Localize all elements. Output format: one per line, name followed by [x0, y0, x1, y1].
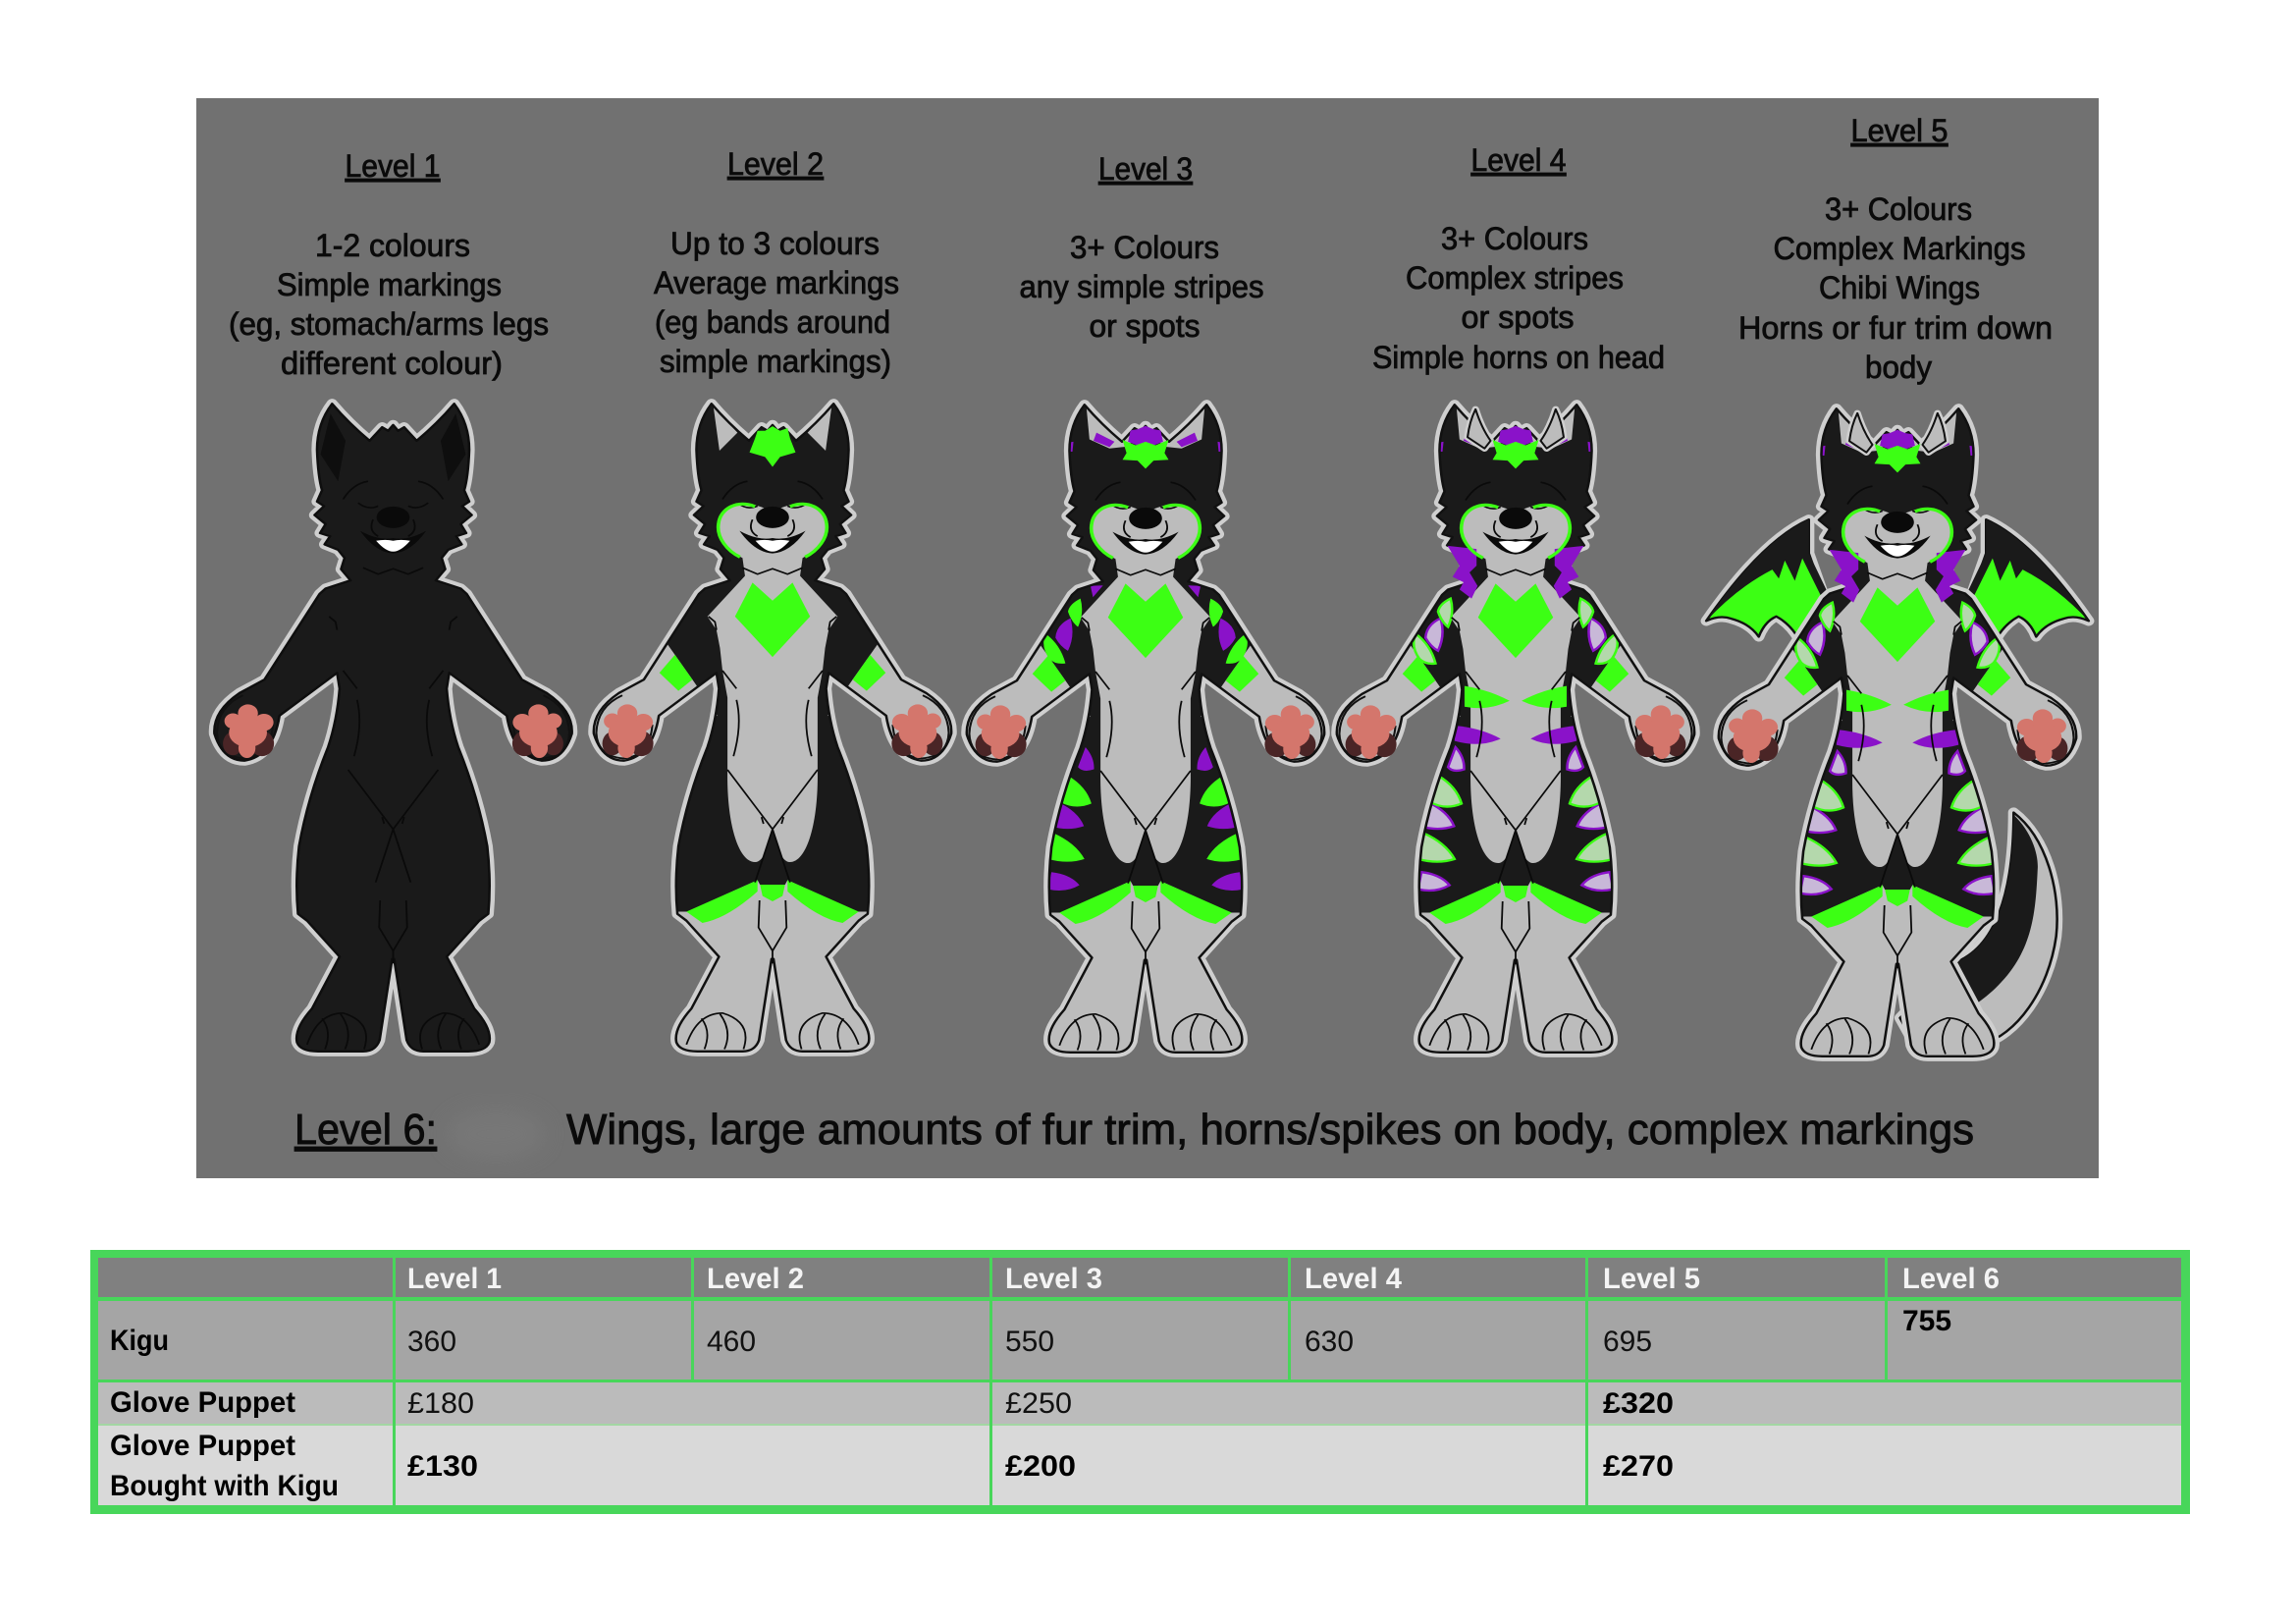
face — [360, 507, 426, 554]
body — [594, 404, 951, 1052]
chest diamond — [1478, 583, 1553, 658]
row: Glove Puppet: £320 — [1603, 1387, 1674, 1420]
text: level 1 description — [229, 148, 549, 381]
heading: level 1: Level 1 — [346, 148, 440, 184]
green crest — [1123, 440, 1168, 468]
heading: level 3: Level 3 — [1098, 151, 1193, 187]
outline — [1337, 405, 1694, 1053]
row: Glove Puppet Bought with Kigu: £130 — [407, 1450, 478, 1483]
chest diamond — [1108, 583, 1183, 658]
header row — [98, 1258, 2181, 1297]
horns — [1849, 413, 1946, 453]
text: level 5 description — [1738, 113, 2053, 385]
body — [214, 404, 572, 1052]
text: level 5 description: Horns or fur trim down — [1738, 310, 2053, 346]
text: level 1 description: Simple markings — [277, 267, 502, 302]
row: Glove Puppet Bought with Kigu — [98, 1426, 2181, 1505]
heading: level 6: Level 6: — [294, 1106, 437, 1154]
row: Glove Puppet: £180 — [407, 1387, 474, 1420]
row: Glove Puppet Bought with Kigu: £200 — [1005, 1450, 1076, 1483]
text: level 2 description: Up to 3 colours — [670, 226, 880, 261]
heading: level 2: Level 2 — [727, 146, 824, 182]
paws — [217, 695, 569, 758]
text: level 4 description: or spots — [1461, 299, 1575, 335]
paws — [969, 696, 1322, 759]
purple crest — [1880, 430, 1915, 453]
line art — [1429, 482, 1602, 1050]
text: level 5 description: Complex Markings — [1773, 231, 2026, 266]
markings — [1402, 406, 1629, 924]
text: level 4 description: Simple horns on head — [1372, 340, 1665, 375]
green crest — [1875, 444, 1920, 472]
row: Glove Puppet: Glove Puppet — [110, 1386, 295, 1419]
figure 4: level 4 character — [1337, 374, 1694, 1053]
body — [1719, 408, 2076, 1056]
halo outline — [214, 404, 572, 1052]
text: level 1 description: (eg, stomach/arms legs — [229, 306, 549, 342]
face — [1112, 508, 1179, 555]
wings — [1706, 519, 2089, 639]
green crest — [1493, 440, 1538, 468]
halo outline — [594, 404, 951, 1052]
line art — [1059, 482, 1232, 1050]
text: level 2 description: simple markings) — [660, 344, 891, 379]
header row: Level 2 — [707, 1263, 804, 1295]
figure 2: level 2 character — [594, 373, 951, 1052]
text: level 5 description: Chibi Wings — [1819, 270, 1980, 305]
body — [1337, 405, 1694, 1053]
figure 5: level 5 character with wings and tail — [1706, 378, 2089, 1056]
line art — [1811, 486, 1984, 1054]
text: level 1 description: different colour) — [281, 346, 503, 381]
face — [1482, 508, 1549, 555]
neck fur trim — [1448, 546, 1583, 599]
muzzle arcs — [1843, 509, 1951, 562]
line art — [307, 481, 479, 1049]
text: level 2 description: (eg bands around — [655, 304, 890, 340]
text: level 5 description: 3+ Colours — [1825, 191, 1972, 227]
row: Kigu: 630 — [1305, 1326, 1354, 1358]
tail — [1900, 812, 2057, 1050]
muzzle arcs — [1462, 505, 1570, 558]
halo outline — [1337, 405, 1694, 1053]
markings — [1785, 410, 2010, 928]
row: Kigu: 695 — [1603, 1326, 1652, 1358]
text: level 4 description: 3+ Colours — [1441, 221, 1588, 256]
halo outline — [967, 405, 1324, 1053]
horns — [1468, 409, 1564, 449]
halo outline — [1719, 408, 2076, 1056]
paws — [596, 695, 949, 758]
purple crest — [1128, 426, 1163, 449]
neck fur trim — [1830, 550, 1965, 603]
row: Kigu: 755 — [1902, 1305, 1951, 1337]
row: Kigu: 360 — [407, 1326, 456, 1358]
chest diamond — [1860, 587, 1935, 662]
text: level 3 description: any simple stripes — [1019, 269, 1264, 304]
row: Kigu: Kigu — [110, 1325, 169, 1357]
text: level 4 description — [1372, 142, 1665, 375]
head crest — [750, 426, 795, 466]
body — [967, 405, 1324, 1053]
text: level 4 description: Complex stripes — [1406, 260, 1624, 296]
panel: level artwork — [196, 98, 2099, 1178]
text: level 3 description: or spots — [1090, 308, 1200, 344]
face — [739, 507, 806, 554]
face — [1864, 512, 1931, 559]
text: level 5 description: body — [1865, 350, 1932, 385]
markings — [1033, 406, 1258, 924]
header row: Level 6 — [1902, 1263, 2000, 1295]
heading: level 5: Level 5 — [1851, 113, 1948, 148]
paws — [1721, 700, 2074, 763]
heading: level 4: Level 4 — [1470, 142, 1567, 178]
row: Glove Puppet Bought with Kigu: Bought with Kigu — [110, 1470, 339, 1502]
row: Glove Puppet Bought with Kigu: Glove Puppet — [110, 1430, 295, 1462]
header row: Level 4 — [1305, 1263, 1402, 1295]
purple crest — [1498, 426, 1533, 449]
figure 3: level 3 character — [967, 374, 1324, 1053]
outline — [967, 405, 1324, 1053]
row: Glove Puppet: £250 — [1005, 1387, 1072, 1420]
row: Glove Puppet — [98, 1382, 2181, 1424]
paws — [1339, 696, 1692, 759]
text: level 6 description: Wings, large amounts of fur trim, horns/spikes on body, complex markings — [566, 1106, 1974, 1154]
chest diamond — [735, 582, 810, 657]
text: level 3 description: 3+ Colours — [1070, 230, 1219, 265]
row: Kigu: 550 — [1005, 1326, 1054, 1358]
text: level 2 description: Average markings — [654, 265, 899, 300]
outline — [1719, 408, 2076, 1056]
line art — [686, 481, 859, 1049]
outline — [594, 404, 951, 1052]
text: level 3 description — [1019, 151, 1264, 344]
markings — [660, 406, 885, 923]
text: level 1 description: 1-2 colours — [315, 228, 470, 263]
header row: Level 5 — [1603, 1263, 1700, 1295]
row: Glove Puppet Bought with Kigu: £270 — [1603, 1450, 1674, 1483]
header row: Level 1 — [407, 1263, 502, 1295]
header row: Level 3 — [1005, 1263, 1102, 1295]
muzzle arcs — [719, 504, 827, 557]
row: Kigu — [98, 1301, 2181, 1380]
muzzle arcs — [1092, 505, 1200, 558]
pricing table — [90, 1250, 2190, 1514]
text: level 2 description — [654, 146, 899, 379]
figure 1: level 1 solid black character — [214, 404, 572, 1052]
row: Kigu: 460 — [707, 1326, 756, 1358]
ears — [321, 413, 465, 481]
